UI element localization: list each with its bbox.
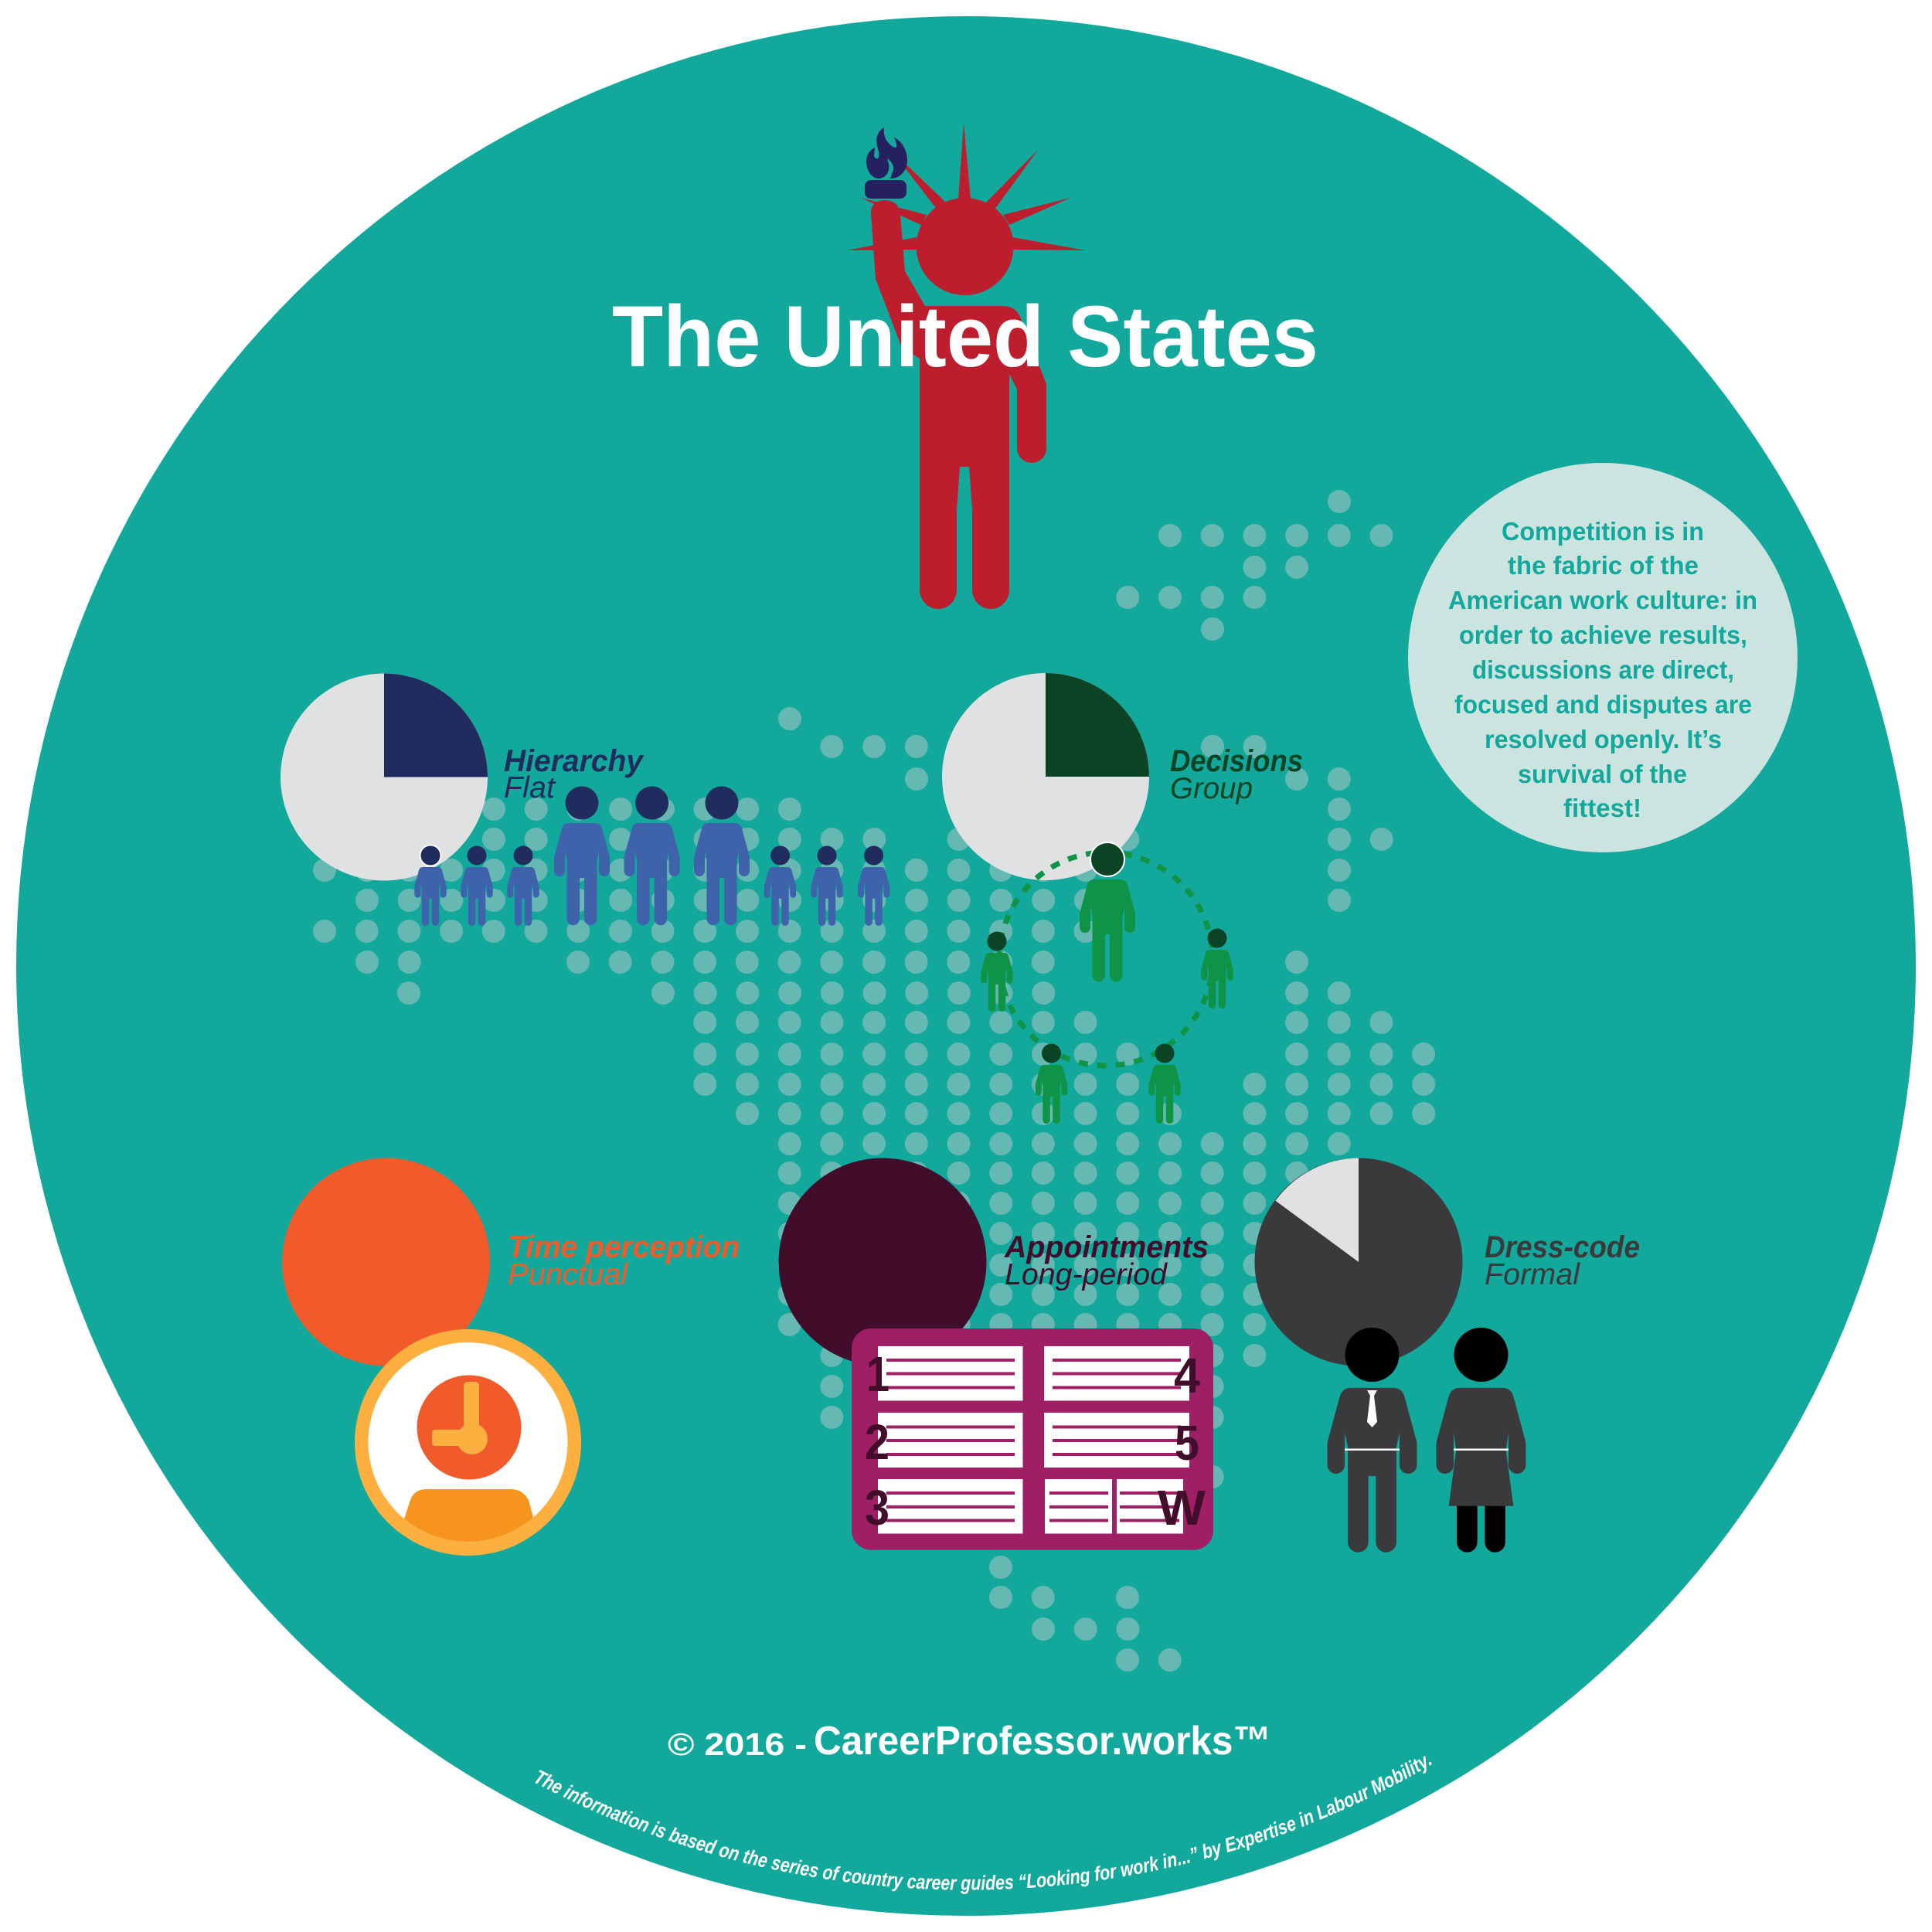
icon: dashed decision circle bbox=[999, 852, 1213, 1066]
callout: competition bubble: fittest! bbox=[1563, 794, 1641, 822]
dress-code label: Dress-code bbox=[1485, 1230, 1640, 1264]
callout: competition bubble: resolved openly. It’s bbox=[1485, 725, 1722, 753]
icon: decisions people group bbox=[981, 842, 1233, 1124]
copyright line: CareerProfessor.works™ bbox=[814, 1719, 1271, 1764]
torch flame bbox=[866, 128, 907, 179]
copyright line: © 2016 - bbox=[668, 1726, 807, 1762]
callout: competition bubble: survival of the bbox=[1518, 760, 1687, 788]
decisions label: Decisions bbox=[1170, 744, 1303, 778]
statue body bbox=[871, 200, 1046, 609]
time perception label bbox=[508, 1230, 740, 1291]
icon: calendar schedule: 5 bbox=[1175, 1415, 1199, 1471]
icon: calendar schedule: 4 bbox=[1174, 1348, 1200, 1403]
decisions pie chart bbox=[942, 673, 1149, 880]
icon: hierarchy people row bbox=[414, 787, 889, 926]
panel: hierarchy bbox=[281, 674, 889, 926]
icon: man in suit bbox=[1328, 1328, 1417, 1553]
dress-code label: Formal bbox=[1485, 1258, 1580, 1291]
hierarchy pie chart bbox=[281, 674, 488, 881]
panel: dress-code bbox=[1255, 1158, 1640, 1553]
panel: decisions bbox=[942, 673, 1303, 1124]
statue head bbox=[917, 198, 1014, 295]
callout: competition bubble: order to achieve results, bbox=[1459, 621, 1747, 649]
statue crown rays bbox=[846, 123, 1086, 250]
dotted world map background bbox=[325, 502, 1424, 1660]
icon: calendar schedule: 3 bbox=[865, 1480, 889, 1536]
dress-code label bbox=[1485, 1230, 1640, 1291]
time perception label: Time perception bbox=[508, 1230, 740, 1264]
callout: competition bubble: American work culture: in bbox=[1448, 586, 1757, 614]
dress-code pie chart bbox=[1255, 1158, 1462, 1366]
time perception label: Punctual bbox=[508, 1258, 628, 1291]
icon: calendar schedule: 1 bbox=[866, 1346, 889, 1402]
appointments label: Long-period bbox=[1005, 1258, 1168, 1291]
callout: competition bubble: the fabric of the bbox=[1508, 551, 1699, 580]
icon: woman in skirt bbox=[1437, 1328, 1526, 1553]
torch base bbox=[865, 180, 906, 199]
hierarchy label: Hierarchy bbox=[504, 744, 645, 778]
title: The United States bbox=[612, 288, 1318, 385]
appointments pie chart bbox=[779, 1158, 986, 1366]
callout: competition bubble bbox=[1408, 463, 1798, 852]
callout: competition bubble: focused and disputes are bbox=[1454, 690, 1752, 719]
decisions label: Group bbox=[1170, 772, 1253, 805]
icon: calendar schedule bbox=[852, 1328, 1213, 1550]
icon: calendar schedule: W bbox=[1158, 1480, 1206, 1536]
curved source note: The information is based on the series of country career guides “Looking for work in...” by Expertise in Labour Mobility. bbox=[535, 1756, 1432, 1894]
icon: calendar schedule: 2 bbox=[865, 1414, 889, 1470]
appointments label: Appointments bbox=[1004, 1230, 1209, 1264]
hierarchy label bbox=[504, 744, 645, 804]
appointments label bbox=[1004, 1230, 1209, 1291]
callout: competition bubble: Competition is in bbox=[1502, 517, 1704, 546]
icon: Statue of Liberty figure bbox=[846, 123, 1086, 609]
panel: time perception bbox=[282, 1158, 740, 1556]
panel: appointments bbox=[779, 1158, 1213, 1550]
callout: competition bubble: discussions are direct, bbox=[1472, 655, 1734, 684]
icon: person with clock head bbox=[355, 1329, 581, 1556]
hierarchy label: Flat bbox=[504, 771, 556, 804]
time perception pie chart bbox=[282, 1158, 490, 1366]
decisions label bbox=[1170, 744, 1303, 805]
